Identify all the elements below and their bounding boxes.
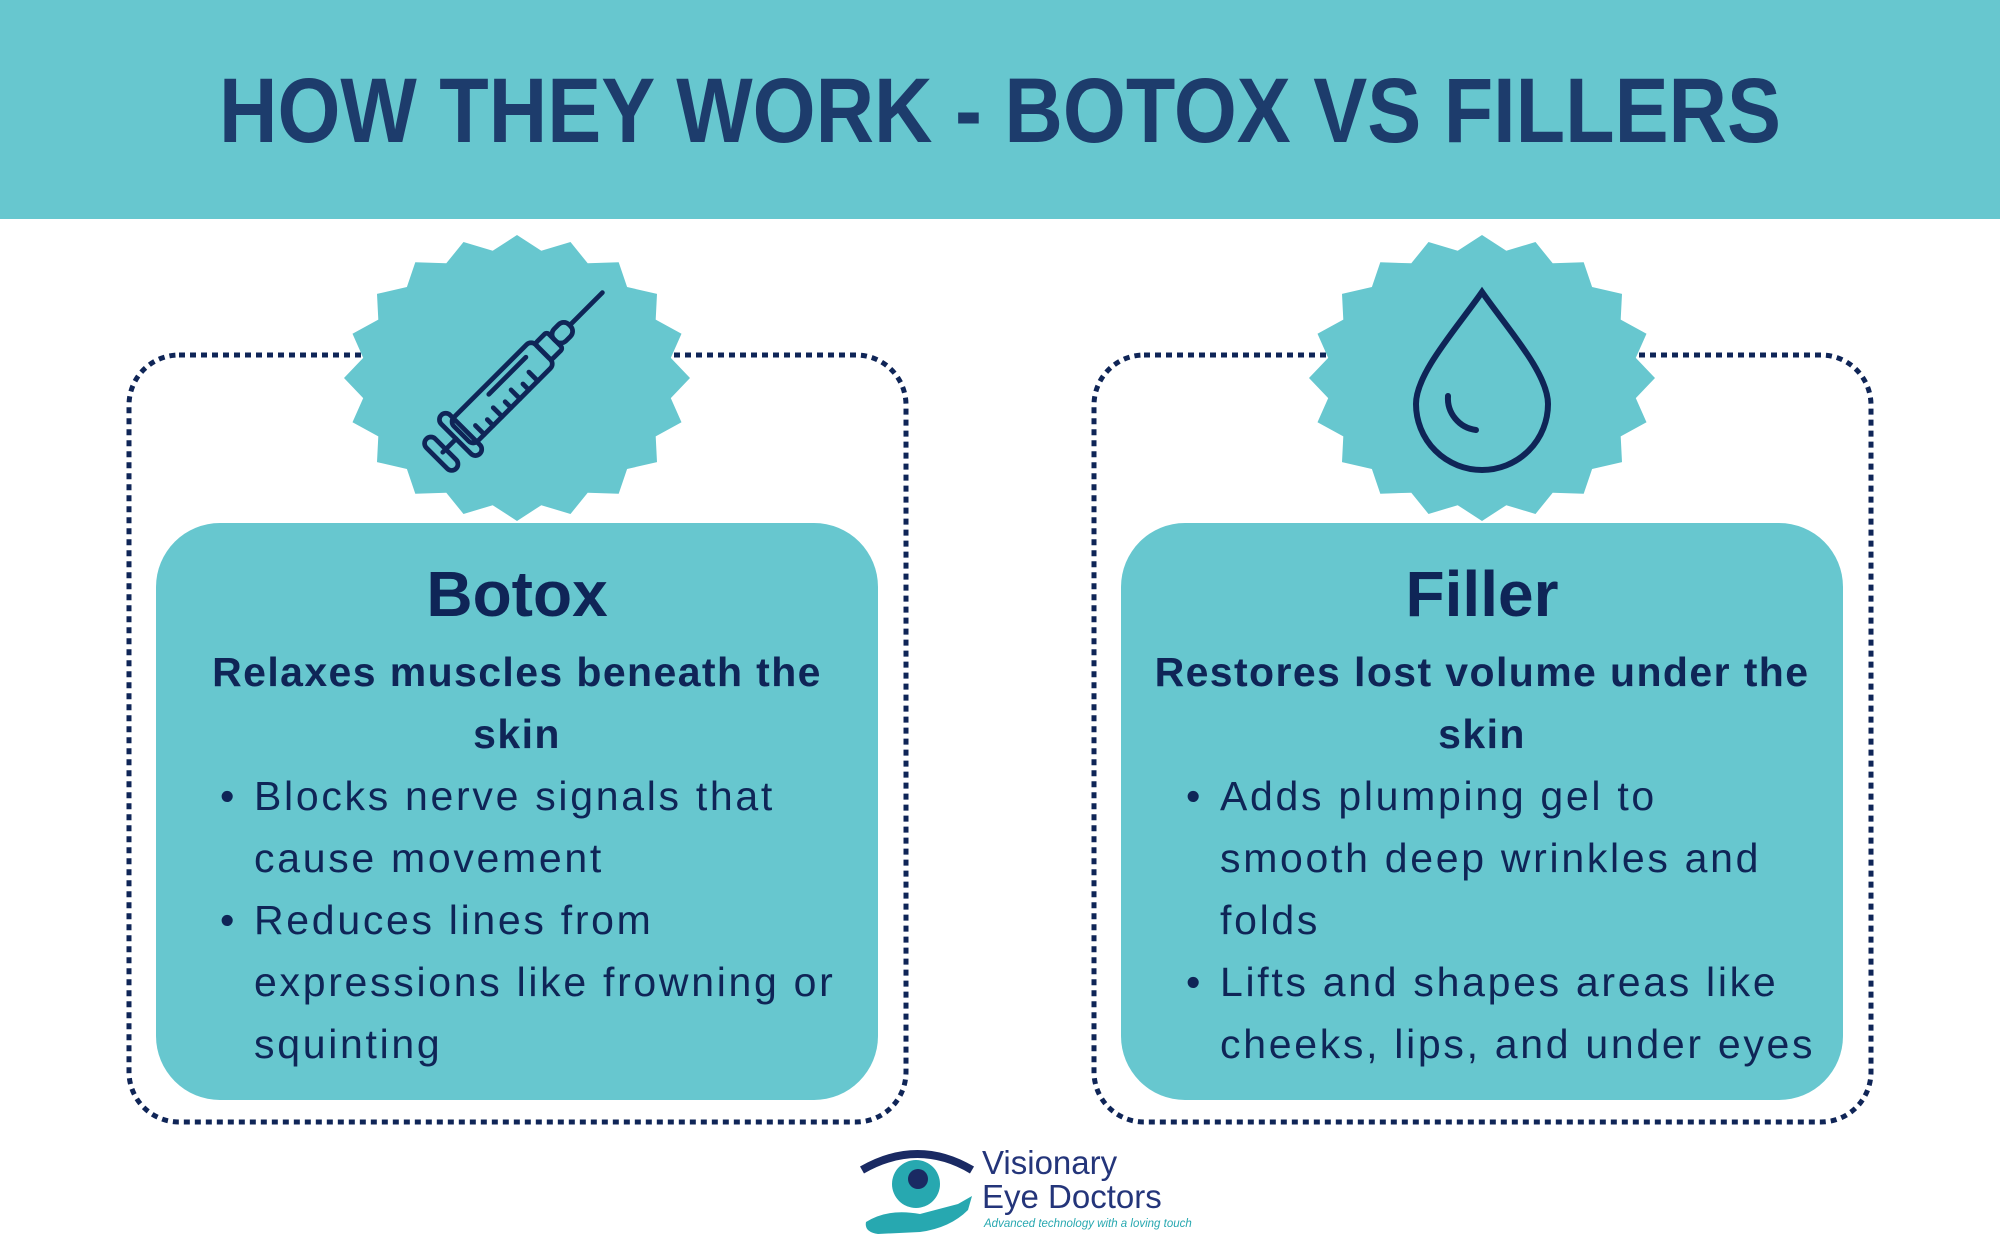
bullets: cheeks, lips, and under eyes [1220,1021,1815,1067]
bullets: Adds plumping gel to [1220,773,1657,819]
bullets: • [220,897,237,943]
header banner [0,0,2000,219]
icon: syringe starburst [344,235,690,521]
logo text: Eye Doctors [982,1178,1162,1215]
subtitle [212,649,822,757]
logo: Advanced technology with a loving touch [984,1218,1192,1230]
subtitle [1155,649,1809,757]
bullets: • [220,773,237,819]
heading: Filler: Filler [1406,558,1558,630]
panel: botox [126,235,908,1124]
logo text: Visionary [982,1144,1117,1181]
subtitle: skin [473,711,561,757]
card: botox [156,523,878,1100]
card: filler [1121,523,1843,1100]
bullets: expressions like frowning or [254,959,836,1005]
bullets: smooth deep wrinkles and [1220,835,1761,881]
bullets: Blocks nerve signals that [254,773,775,819]
heading: Botox: Botox [426,558,608,630]
bullets [220,773,836,1067]
bullets: folds [1220,897,1320,943]
bullets: cause movement [254,835,604,881]
subtitle: Restores lost volume under the [1155,649,1809,695]
icon: drop starburst [1309,235,1655,521]
bullets: • [1186,959,1203,1005]
bullets: Lifts and shapes areas like [1220,959,1778,1005]
bullets: • [1186,773,1203,819]
logo [860,1144,1192,1234]
icon: eye in hand [860,1150,974,1234]
bullets: Reduces lines from [254,897,654,943]
panel: filler [1092,235,1874,1124]
subtitle: skin [1438,711,1526,757]
bullets [1186,773,1815,1067]
title: HOW THEY WORK - BOTOX VS FILLERS [219,60,1781,162]
bullets: squinting [254,1021,442,1067]
logo text [982,1144,1162,1215]
subtitle: Relaxes muscles beneath the [212,649,822,695]
